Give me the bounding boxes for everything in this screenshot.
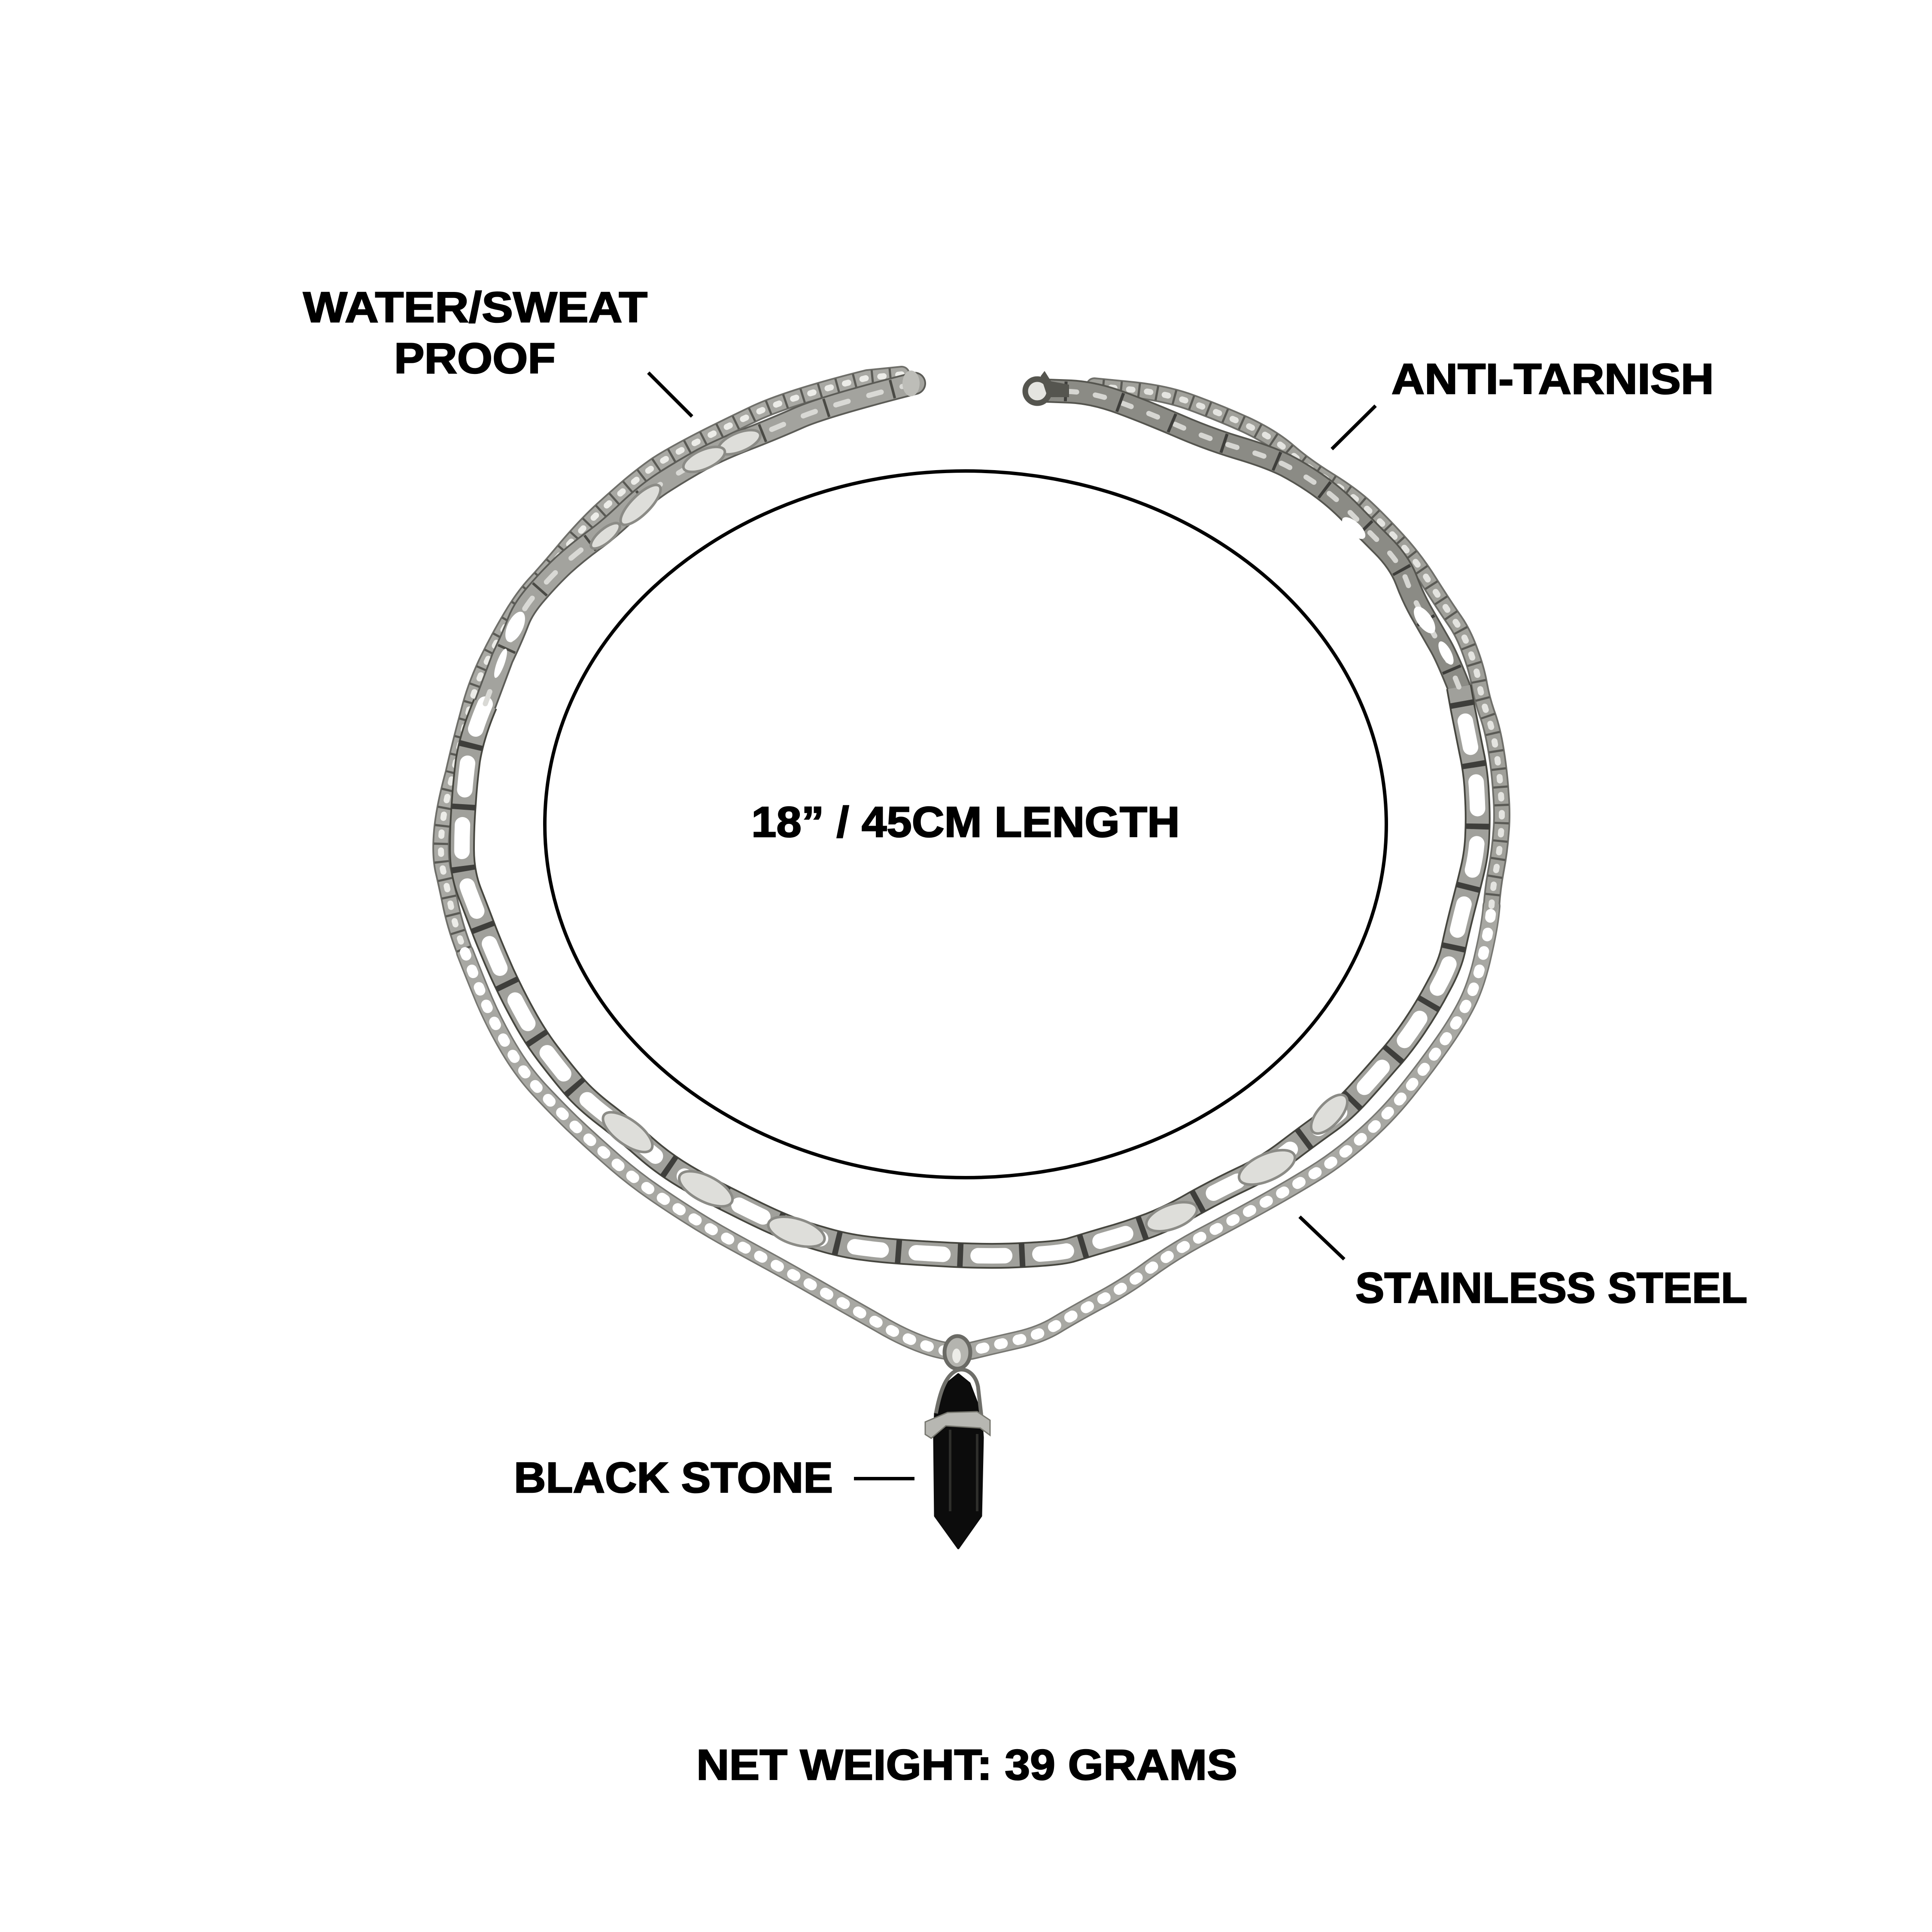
length label: 18” / 45CM LENGTH — [751, 798, 1180, 846]
large cable chain — [462, 383, 1478, 1256]
callout: stainless steel — [1300, 1217, 1747, 1312]
thin curb chain — [441, 374, 1502, 1352]
leader line — [1300, 1217, 1344, 1259]
heading: anti-tarnish: ANTI-TARNISH — [1391, 355, 1714, 403]
flat polished links — [587, 425, 1354, 1253]
right clasp — [1025, 371, 1069, 403]
necklace — [441, 371, 1502, 1548]
callout: anti-tarnish — [1332, 355, 1714, 449]
callout: water/sweat proof — [303, 283, 692, 416]
heading: water/sweat proof — [303, 283, 647, 383]
leader line — [648, 373, 692, 416]
heading: water/sweat proof: PROOF — [394, 334, 556, 383]
heading: stainless steel: STAINLESS STEEL — [1355, 1264, 1747, 1312]
left chain end — [902, 371, 920, 396]
pendant bail ring — [945, 1336, 970, 1369]
leader line — [1332, 406, 1376, 449]
leader line — [854, 1477, 914, 1480]
length circle — [545, 471, 1386, 1178]
heading: black stone: BLACK STONE — [514, 1454, 833, 1502]
open links at chain shoulders — [492, 513, 1457, 679]
black stone pendant — [925, 1370, 990, 1548]
heading: water/sweat proof: WATER/SWEAT — [303, 283, 647, 331]
net weight: NET WEIGHT: 39 GRAMS — [696, 1741, 1237, 1789]
